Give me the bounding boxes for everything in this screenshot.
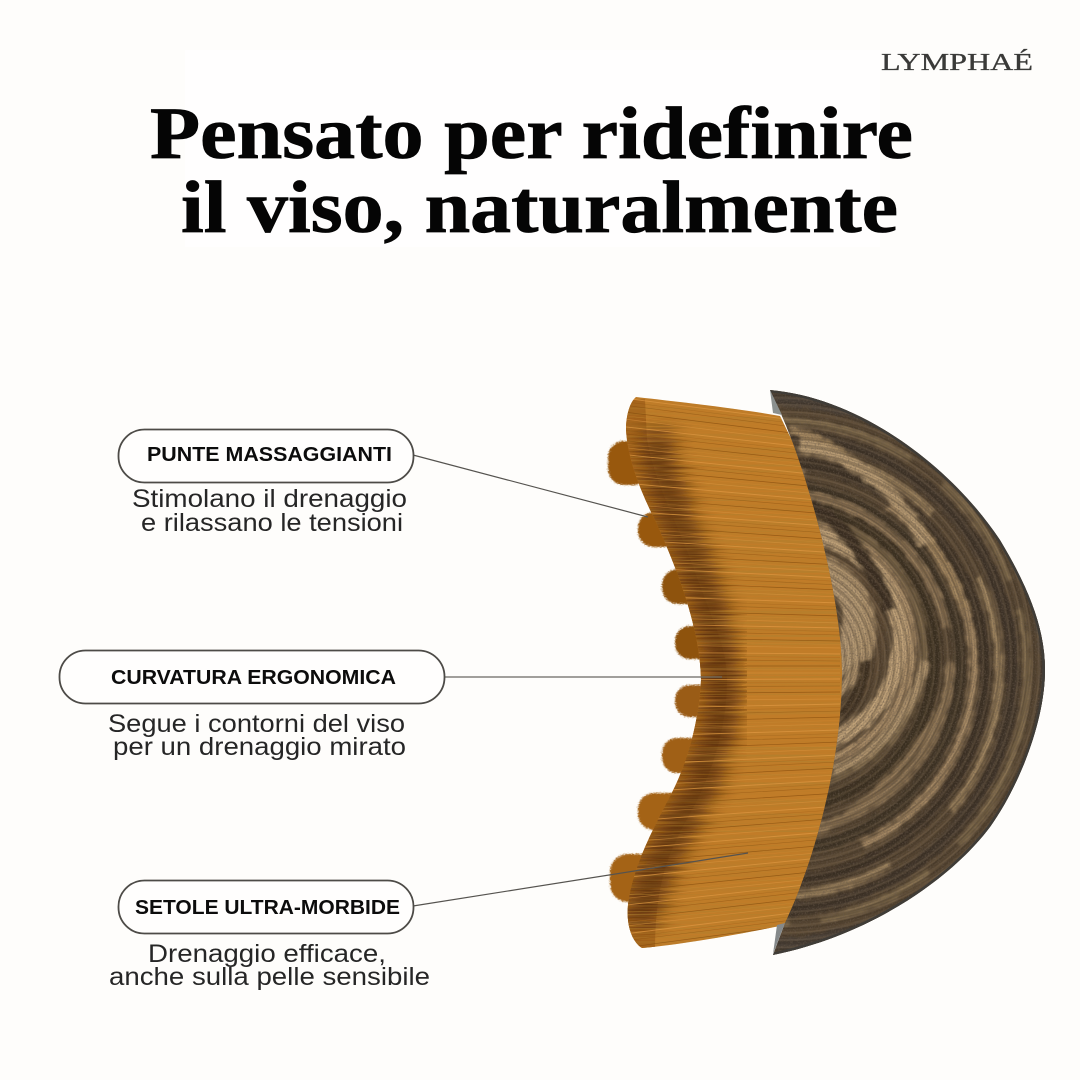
label pill: CURVATURA ERGONOMICA <box>111 667 396 689</box>
label pill: PUNTE MASSAGGIANTI <box>147 444 392 466</box>
label pill <box>60 650 444 704</box>
description <box>109 940 430 991</box>
title: il viso, naturalmente <box>181 167 898 249</box>
brand logo: LYMPHAÉ: LYMPHAÉ <box>881 50 1033 76</box>
description: Stimolano il drenaggio <box>132 485 407 513</box>
grey tip: bottom <box>773 923 785 954</box>
label pill <box>118 880 414 934</box>
title <box>150 93 913 249</box>
grey tip: top <box>770 390 782 415</box>
description: anche sulla pelle sensibile <box>109 963 430 991</box>
wooden handle <box>770 390 1045 955</box>
callout: punte massaggianti <box>118 430 414 537</box>
description: Segue i contorni del viso <box>108 710 405 738</box>
description <box>132 485 407 537</box>
leader line: punte massaggianti <box>413 455 648 517</box>
description: Drenaggio efficace, <box>148 940 386 968</box>
brush illustration <box>606 390 1045 955</box>
description: per un drenaggio mirato <box>113 733 406 761</box>
description: e rilassano le tensioni <box>141 509 403 537</box>
label pill <box>118 430 414 482</box>
callout: curvatura ergonomica <box>60 650 444 761</box>
leader line: curvatura ergonomica <box>445 676 722 678</box>
leader line: setole ultra-morbide <box>413 853 748 906</box>
infographic canvas <box>58 48 1045 990</box>
bristles <box>626 397 842 948</box>
description <box>108 710 406 761</box>
label pill: SETOLE ULTRA-MORBIDE <box>135 897 400 919</box>
massage tips <box>608 441 715 902</box>
callout: setole ultra-morbide <box>109 880 430 991</box>
title: Pensato per ridefinire <box>150 93 913 175</box>
